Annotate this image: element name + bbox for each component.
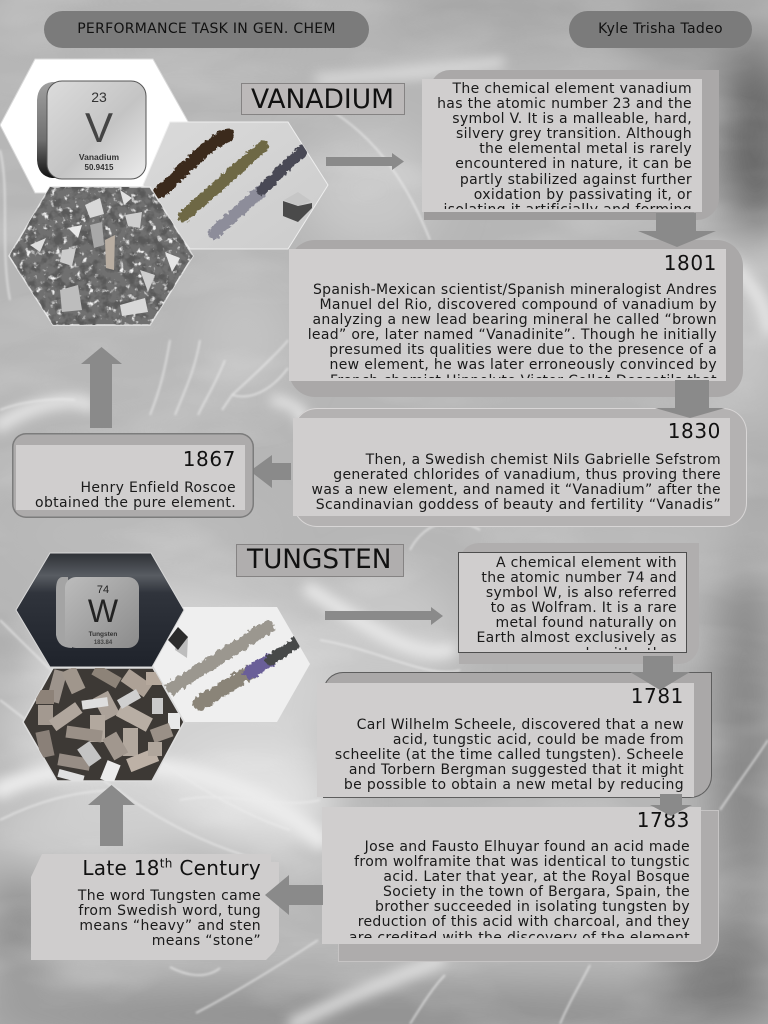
panel: 1830 Sefstrom xyxy=(293,408,747,527)
year: 1781: 1781 xyxy=(631,684,684,708)
hexagon: tungsten element tile: W xyxy=(88,593,119,629)
text: vanadium description: has the atomic number 23 and the xyxy=(437,96,692,112)
text: 1867 pure element: obtained the pure element. xyxy=(35,495,236,511)
arrow: 1867 up to vanadium images xyxy=(81,347,122,428)
text: 1801 discovery: new element, he was later erroneously convinced by xyxy=(330,357,717,373)
text: 1783 isolation: from wolframite that was identical to tungstic xyxy=(354,854,690,870)
hexagon: vanadium element tile: 50.9415 xyxy=(85,163,114,172)
text: 1801 discovery: presumed its qualities were due to the presence of a xyxy=(329,342,717,358)
text: 1830 naming: generated chlorides of vanadium, thus proving there xyxy=(333,467,721,483)
text: tungsten description: symbol W, is also referred xyxy=(486,585,677,601)
arrow: 1781 down to 1783 xyxy=(650,794,692,816)
text: vanadium description: symbol V. It is a malleable, hard, xyxy=(452,111,692,127)
text: 1783 isolation: acid. Later that year, at the Royal Bosque xyxy=(383,869,690,885)
text: 1830 naming: Scandinavian goddess of beauty and fertility “Vanadis” xyxy=(316,497,721,513)
text: 1781 tungstic acid: acid, tungstic acid, could be made from xyxy=(393,732,684,748)
text: 1830 naming xyxy=(312,453,721,513)
arrow: tungsten images to description xyxy=(325,607,443,625)
arrow: 1783 left to late 18th century xyxy=(265,875,323,915)
hexagon: vanadium element tile xyxy=(0,59,190,193)
text: vanadium description: the elemental metal is rarely xyxy=(479,141,692,157)
hexagon: three vanadium rods xyxy=(143,122,328,249)
year: 1801: 1801 xyxy=(664,251,717,275)
hexagon: tungsten element tile: Tungsten xyxy=(89,631,117,638)
tungsten hexagon images xyxy=(16,552,310,781)
arrow: 1801 down to 1830 xyxy=(655,380,725,418)
text: tungsten description: Earth almost exclusively as xyxy=(476,630,677,646)
arrow: description down to 1781 xyxy=(630,656,690,690)
text: tungsten description xyxy=(476,556,677,650)
year: 1830: 1830 xyxy=(668,419,721,443)
hexagon: vanadium element tile: Vanadium xyxy=(79,152,120,162)
text: 1801 discovery: Manuel del Rio, discovered compound of vanadium by xyxy=(319,297,717,313)
text: 1801 discovery xyxy=(308,283,717,378)
text: word origin: from Swedish word, tung xyxy=(78,903,261,919)
year: 1867: 1867 xyxy=(183,447,236,471)
panel: 1783 Elhuyar xyxy=(322,807,719,962)
text: word origin xyxy=(78,889,260,945)
text: vanadium description: partly stabilized against further xyxy=(460,172,692,188)
text: vanadium description xyxy=(437,82,692,209)
text: 1781 tungstic acid: scheelite (at the time called tungsten). Scheele xyxy=(335,747,684,763)
panel: late 18th century word origin xyxy=(31,854,280,961)
text: 1783 isolation: reduction of this acid with charcoal, and they xyxy=(358,914,690,930)
hexagon: vanadium metal pieces xyxy=(8,186,194,326)
header pill: author: Kyle Trisha Tadeo xyxy=(598,21,723,37)
text: 1783 isolation: brother succeeded in isolating tungsten by xyxy=(375,899,690,915)
panel: 1781 Scheele xyxy=(317,672,712,798)
hexagon: tungsten element tile: 74 xyxy=(97,584,109,596)
panel: 1867 Roscoe xyxy=(12,433,254,518)
arrow: 1830 left to 1867 xyxy=(254,455,291,488)
panel: tungsten description xyxy=(458,543,699,664)
text: vanadium description: oxidation by passivating it, or xyxy=(474,187,692,203)
text: 1783 isolation: Society in the town of Bergara, Spain, the xyxy=(383,884,690,900)
arrow: description down to 1801 xyxy=(638,213,716,247)
text: 1801 discovery: lead” ore, later named “Vanadinite”. Though he initially xyxy=(308,327,717,343)
text: 1867 pure element xyxy=(35,481,236,511)
text: vanadium description: silvery grey transition. Although xyxy=(456,126,692,142)
text: 1781 tungstic acid: and Torbern Bergman suggested that it might xyxy=(349,762,684,778)
header pill: author xyxy=(569,11,752,48)
text: word origin: means “heavy” and sten xyxy=(79,918,261,934)
text: 1781 tungstic acid: be possible to obtain a new metal by reducing xyxy=(344,777,684,793)
hexagon: vanadium element tile: V xyxy=(85,104,113,151)
hexagon: tungsten element tile xyxy=(16,553,184,667)
text: 1781 tungstic acid xyxy=(335,718,684,793)
text: word origin: means “stone” xyxy=(152,933,261,949)
heading: TUNGSTEN: TUNGSTEN xyxy=(247,545,391,575)
hexagon: tungsten carbide pieces xyxy=(23,664,184,784)
vanadium hexagon images xyxy=(0,58,328,326)
text: vanadium description: encountered in nature, it can be xyxy=(455,156,692,172)
text: 1783 isolation xyxy=(349,840,690,938)
year: 1783: 1783 xyxy=(637,808,690,832)
text: tungsten description: the atomic number 74 and xyxy=(481,570,677,586)
arrow: vanadium images to description xyxy=(326,153,404,170)
panel: vanadium description xyxy=(422,70,719,220)
text: tungsten description: metal found naturally on xyxy=(496,615,677,631)
hexagon: tungsten rods xyxy=(152,607,310,722)
heading: VANADIUM: VANADIUM xyxy=(251,84,394,115)
heading: Late 18th Century: Late 18th Century xyxy=(82,856,261,880)
header pill: task title xyxy=(44,11,369,48)
hexagon: tungsten element tile: 183.84 xyxy=(94,640,113,646)
text: 1801 discovery: analyzing a new lead bearing mineral he called “brown xyxy=(312,312,717,328)
text: tungsten description: to as Wolfram. It is a rare xyxy=(491,600,677,616)
text: 1830 naming: was a new element, and named it “Vanadium” after the xyxy=(312,482,721,498)
header pill: task title: PERFORMANCE TASK IN GEN. CHEM xyxy=(77,21,336,37)
hexagon: vanadium element tile: 23 xyxy=(91,89,107,105)
panel: 1801 del Rio xyxy=(289,240,743,397)
arrow: late 18th century up to tungsten images xyxy=(88,785,135,846)
